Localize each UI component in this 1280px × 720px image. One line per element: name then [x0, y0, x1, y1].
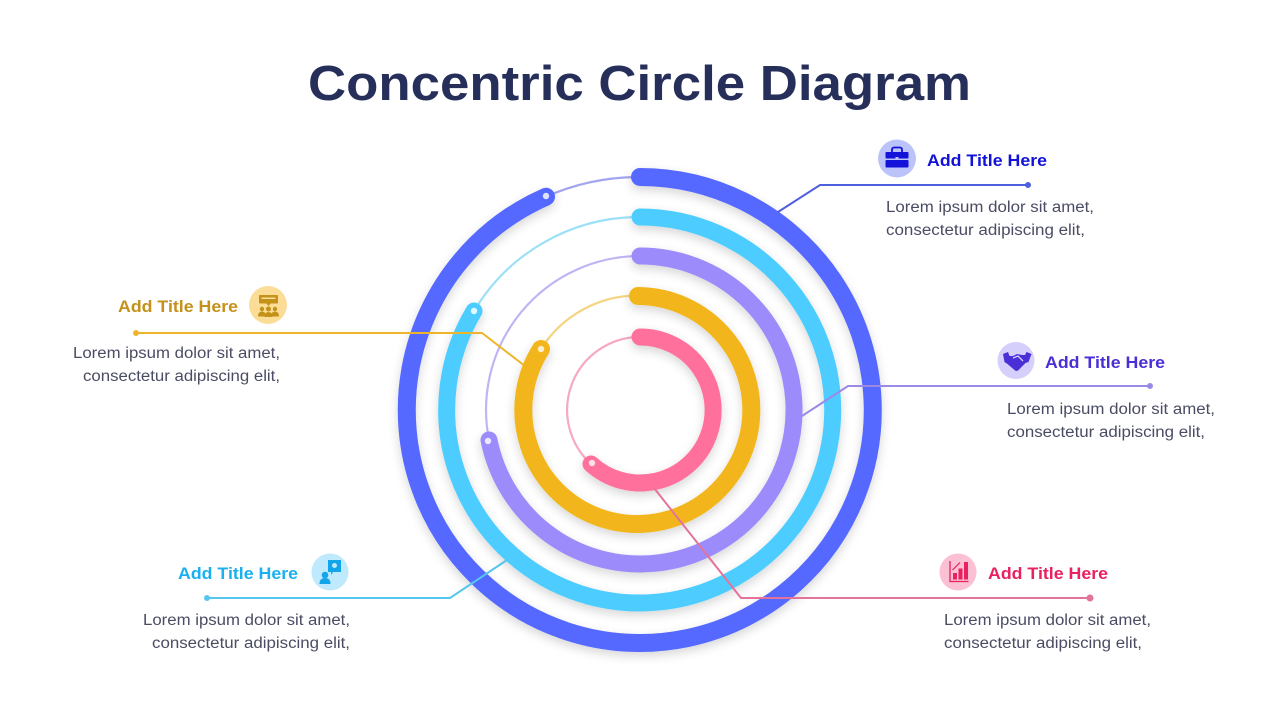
icon: meeting group — [249, 286, 287, 324]
text block — [944, 612, 1151, 652]
heading: Add Title Here — [118, 297, 238, 316]
text block — [1007, 401, 1215, 441]
callout: blue top right — [778, 140, 1094, 239]
text block: Lorem ipsum dolor sit amet, — [1007, 401, 1215, 418]
text block: Lorem ipsum dolor sit amet, — [143, 612, 350, 629]
title: Concentric Circle Diagram — [308, 57, 971, 111]
leader line: cyan — [205, 560, 507, 600]
text block: consectetur adipiscing elit, — [944, 635, 1142, 652]
heading: Add Title Here — [927, 151, 1047, 170]
icon: handshake — [998, 342, 1034, 379]
heading: Add Title Here — [988, 564, 1108, 583]
ring 4: amber — [523, 295, 751, 524]
leader line: amber — [134, 331, 525, 366]
text block: Lorem ipsum dolor sit amet, — [944, 612, 1151, 629]
heading: Add Title Here — [178, 564, 298, 583]
text block: consectetur adipiscing elit, — [152, 635, 350, 652]
icon: briefcase — [878, 140, 916, 178]
callout: cyan bottom left — [143, 554, 507, 652]
callout: amber left — [73, 286, 525, 385]
ring 2: cyan — [447, 217, 833, 603]
icon: presenter — [312, 554, 348, 590]
ring 3: purple — [485, 256, 794, 564]
text block: consectetur adipiscing elit, — [1007, 424, 1205, 441]
text block: Lorem ipsum dolor sit amet, — [73, 345, 280, 362]
callout: pink bottom right — [654, 488, 1151, 652]
leader line: purple — [802, 384, 1152, 416]
text block — [143, 612, 350, 652]
concentric circle chart — [407, 177, 873, 643]
text block — [886, 199, 1094, 239]
leader line: blue — [778, 183, 1030, 212]
ring 1: outer blue — [407, 177, 873, 643]
ring 5: pink — [567, 337, 713, 483]
text block: consectetur adipiscing elit, — [83, 368, 280, 385]
text block: consectetur adipiscing elit, — [886, 222, 1085, 239]
leader line: pink — [654, 488, 1092, 600]
callout: purple right — [802, 342, 1215, 441]
heading: Add Title Here — [1045, 353, 1165, 372]
icon: bar chart — [940, 554, 976, 590]
text block: Lorem ipsum dolor sit amet, — [886, 199, 1094, 216]
text block — [73, 345, 280, 385]
